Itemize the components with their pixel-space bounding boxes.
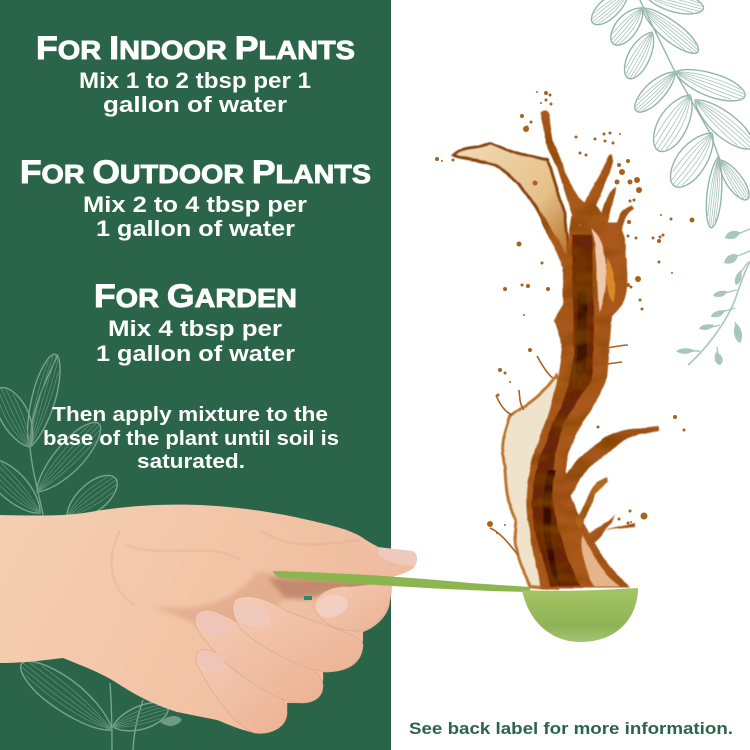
text: application instructions: base of the plant until soil is — [43, 428, 339, 450]
text: outdoor mix — [83, 192, 307, 241]
text: outdoor mix: 1 gallon of water — [96, 216, 295, 241]
text: application instructions: saturated. — [137, 451, 245, 473]
finger 1 — [233, 597, 363, 672]
illustration: hand — [0, 505, 417, 733]
text: footer note: See back label for more information. — [409, 719, 733, 738]
title: for outdoor plants: FOR OUTDOOR PLANTS — [20, 154, 371, 190]
pale streak — [592, 228, 606, 312]
index — [313, 582, 391, 631]
panel: green background — [0, 0, 391, 750]
decoration: left panel leaves upper — [0, 351, 125, 528]
left pale sheet — [503, 375, 575, 588]
pale bottom right — [581, 535, 620, 587]
text: garden mix — [96, 316, 295, 366]
text: garden mix: 1 gallon of water — [96, 341, 295, 366]
decoration: left panel leaves lower — [13, 650, 182, 750]
palm and wrist — [0, 505, 417, 733]
text: indoor mix: Mix 1 to 2 tbsp per 1 — [79, 68, 311, 93]
text: application instructions — [43, 404, 339, 473]
decoration: top-right leaf branch — [586, 0, 750, 228]
text: garden mix: Mix 4 tbsp per — [108, 316, 282, 341]
text: indoor mix — [79, 68, 311, 117]
title: for indoor plants: FOR INDOOR PLANTS — [36, 30, 355, 66]
nails — [378, 547, 417, 566]
title: for garden: FOR GARDEN — [94, 278, 297, 314]
upper wing — [453, 143, 570, 265]
text: application instructions: Then apply mixture to the — [52, 404, 328, 426]
text: indoor mix: gallon of water — [103, 92, 287, 117]
droplets — [435, 91, 694, 534]
right arm — [553, 426, 659, 515]
finger 2 — [195, 611, 323, 703]
palm shadows and creases — [110, 530, 368, 626]
gap teal — [304, 596, 312, 600]
main column — [526, 111, 634, 588]
illustration: measuring spoon — [273, 571, 638, 642]
decoration: right solid sprig — [676, 228, 750, 365]
dark core — [532, 235, 594, 586]
illustration: coffee splash — [435, 91, 694, 588]
text: outdoor mix: Mix 2 to 4 tbsp per — [83, 192, 307, 217]
finger 3 — [196, 650, 287, 733]
